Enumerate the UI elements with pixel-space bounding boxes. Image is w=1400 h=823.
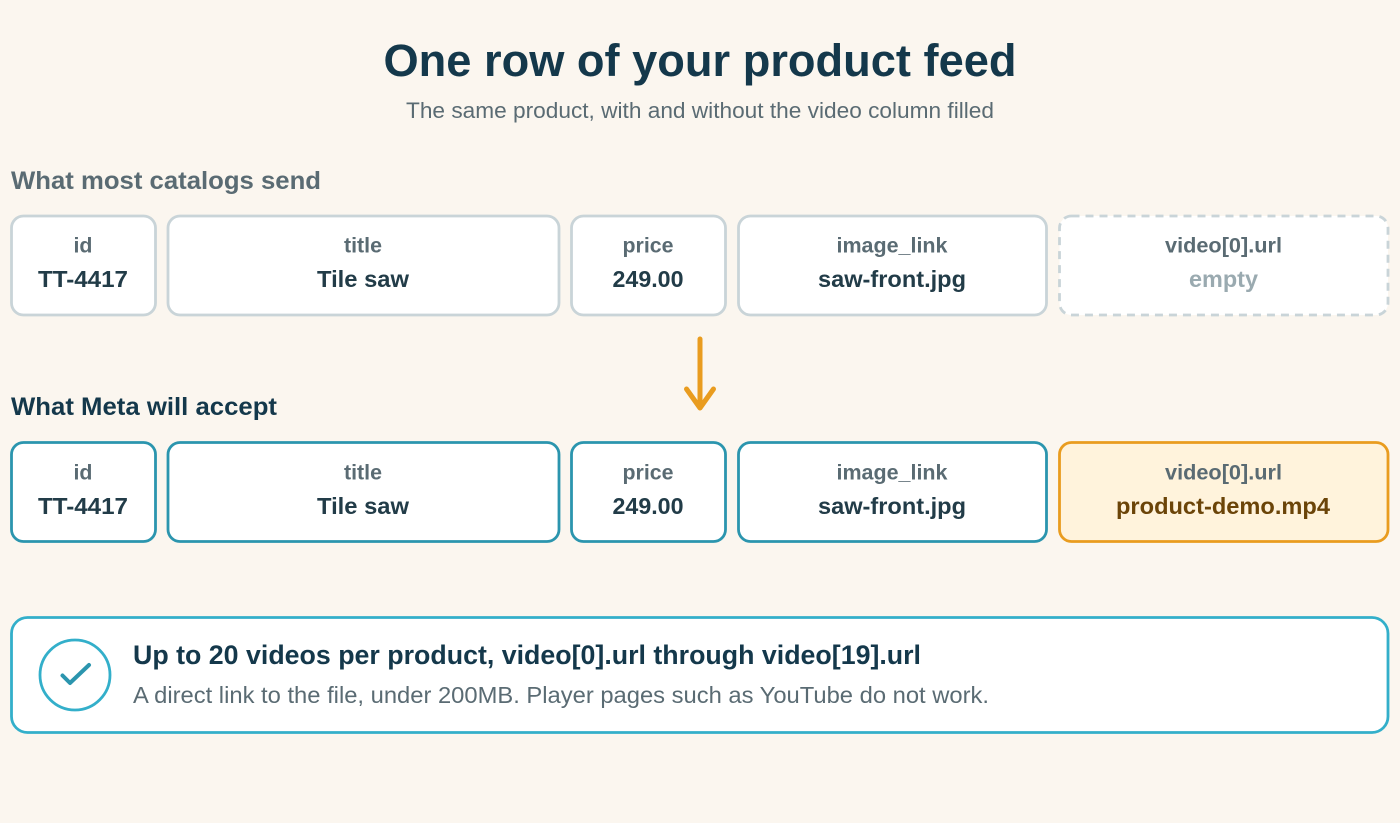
row: current feed xyxy=(12,216,1388,315)
callout body: A direct link to the file, under 200MB. Player pages such as YouTube do not work. xyxy=(133,682,989,708)
title: One row of your product feed xyxy=(384,35,1016,86)
callout heading: Up to 20 videos per product, video[0].url through video[19].url xyxy=(133,640,921,670)
callout xyxy=(12,618,1388,732)
field: price xyxy=(572,442,726,542)
field: title xyxy=(168,442,559,542)
heading: what most catalogs send: What most catalogs send xyxy=(11,167,321,195)
field: price: price xyxy=(622,462,674,484)
field: filled video url: video[0].url xyxy=(1165,462,1282,484)
field: id xyxy=(12,442,156,542)
field: id: id xyxy=(74,234,92,258)
heading: what Meta will accept: What Meta will accept xyxy=(11,393,278,421)
icon: check in circle xyxy=(40,640,110,710)
field: empty video url: video[0].url xyxy=(1165,234,1282,258)
arrow xyxy=(686,339,714,408)
field: empty video url xyxy=(1060,216,1388,315)
field: title: Tile saw xyxy=(317,266,409,292)
field: price: 249.00 xyxy=(612,266,684,292)
field: empty video url: empty xyxy=(1189,266,1258,292)
row: accepted feed xyxy=(12,442,1388,542)
field: id: TT-4417 xyxy=(38,493,128,519)
field: title xyxy=(168,216,559,315)
field: image_link xyxy=(738,442,1046,542)
field: image_link: image_link xyxy=(836,462,948,484)
field: image_link: saw-front.jpg xyxy=(818,493,966,519)
field: id xyxy=(12,216,156,315)
field: price xyxy=(572,216,726,315)
field: title: title xyxy=(344,234,382,258)
field: image_link: image_link xyxy=(836,234,948,258)
field: filled video url: product-demo.mp4 xyxy=(1116,493,1330,519)
field: price: price xyxy=(622,234,674,258)
field: title: title xyxy=(344,462,382,484)
field: id: TT-4417 xyxy=(38,266,128,292)
field: filled video url xyxy=(1060,442,1388,542)
field: title: Tile saw xyxy=(317,493,409,519)
field: image_link: saw-front.jpg xyxy=(818,266,966,292)
subtitle: The same product, with and without the video column filled xyxy=(406,98,994,123)
field: image_link xyxy=(738,216,1046,315)
field: price: 249.00 xyxy=(612,493,684,519)
field: id: id xyxy=(74,462,92,484)
